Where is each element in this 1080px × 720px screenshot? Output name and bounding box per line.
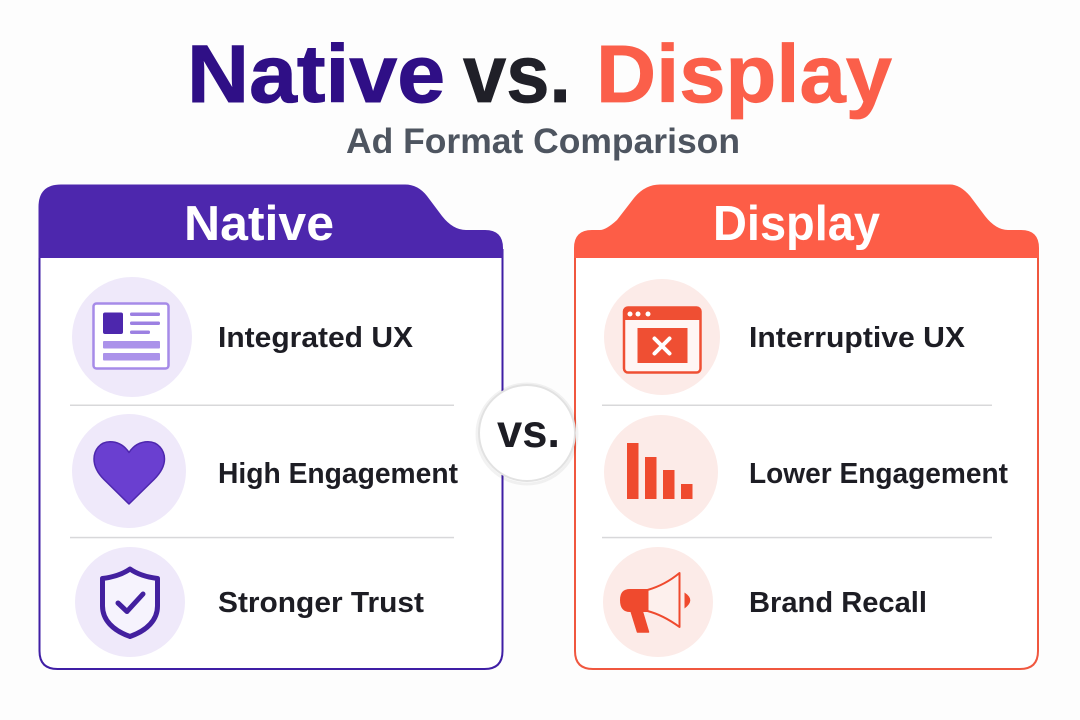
row: stronger trust xyxy=(75,547,424,657)
icon: shield xyxy=(75,547,185,657)
label: integrated UX: Integrated UX xyxy=(218,322,414,354)
label: high engagement: High Engagement xyxy=(218,458,458,490)
heading: native: Native xyxy=(184,197,334,251)
vs badge: vs. xyxy=(497,405,560,457)
icon: megaphone xyxy=(603,547,713,657)
row: interruptive UX xyxy=(604,279,966,395)
icon: heart xyxy=(72,414,186,528)
icon: article layout xyxy=(72,277,192,397)
panel header: display xyxy=(574,184,1039,258)
title xyxy=(187,29,892,120)
label: interruptive UX: Interruptive UX xyxy=(749,322,966,354)
row: brand recall xyxy=(603,547,927,657)
icon: descending bars xyxy=(604,415,718,529)
row: integrated UX xyxy=(72,277,414,397)
panel body: native xyxy=(40,250,502,669)
subtitle: Ad Format Comparison xyxy=(346,122,740,161)
row: lower engagement xyxy=(604,415,1008,529)
heading: display: Display xyxy=(713,197,880,251)
label: lower engagement: Lower Engagement xyxy=(749,458,1008,490)
panel header: native xyxy=(38,184,503,258)
title: Native xyxy=(187,29,445,120)
title: Display xyxy=(596,29,892,120)
title: vs. xyxy=(463,29,571,120)
label: stronger trust: Stronger Trust xyxy=(218,587,424,619)
label: brand recall: Brand Recall xyxy=(749,587,927,619)
panel body: display xyxy=(575,250,1038,669)
icon: browser popup xyxy=(604,279,720,395)
vs badge xyxy=(477,384,577,484)
panel: native xyxy=(38,184,503,669)
row: high engagement xyxy=(72,414,458,528)
panel: display xyxy=(574,184,1039,669)
